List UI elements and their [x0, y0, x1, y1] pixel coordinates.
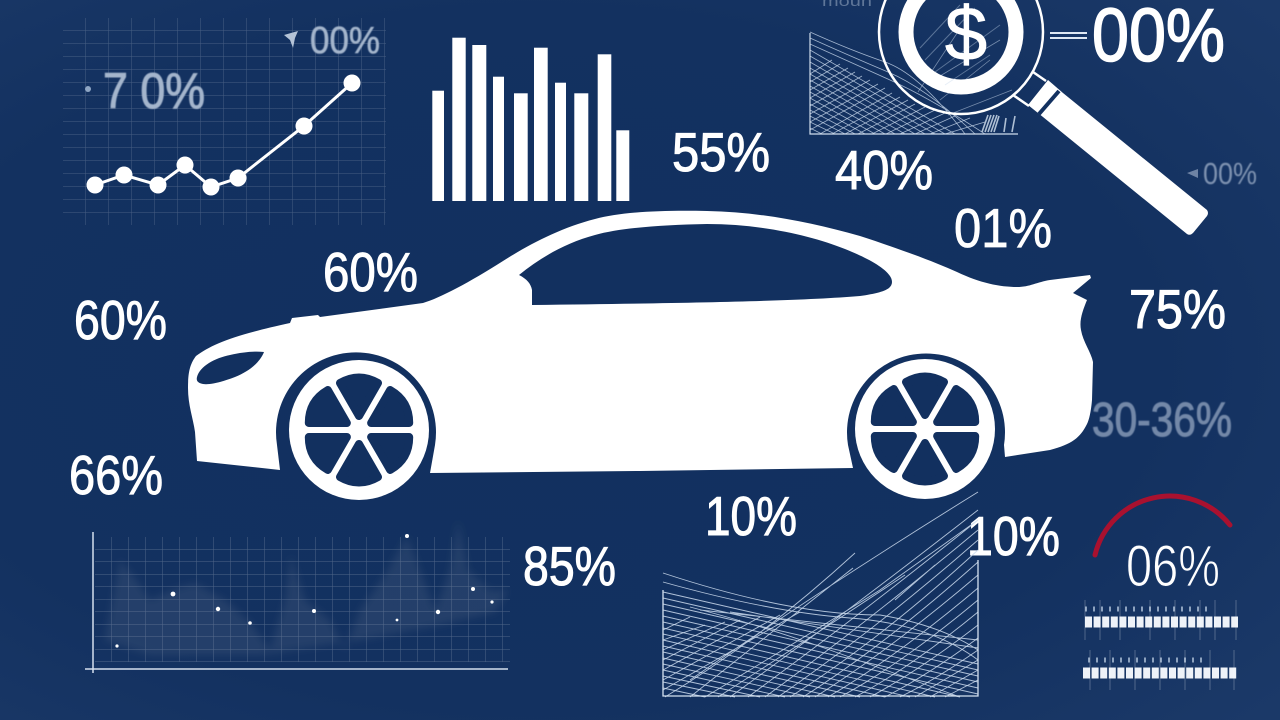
red gauge arc: [1095, 496, 1230, 555]
label 85%: 85%: [523, 535, 616, 597]
faded label 70%: 7 0%: [103, 63, 205, 119]
car headlight: [197, 352, 264, 384]
small hatched block: [982, 115, 1015, 132]
faint label 00% right: 00%: [1203, 156, 1257, 191]
barcode row one: [1085, 600, 1238, 640]
panel: top-left line chart: [63, 18, 386, 225]
label 60% hood: 60%: [323, 241, 418, 303]
label 55%: 55%: [672, 121, 770, 183]
faded label 30-36%: 30-36%: [1092, 394, 1232, 447]
label 40%: 40%: [835, 139, 933, 201]
chart axes: [810, 33, 1018, 134]
front wheel: [289, 360, 429, 500]
icon: magnifying glass with dollar: [879, 0, 1208, 235]
chart grid: [95, 537, 510, 662]
faint label 00% right: [1187, 156, 1257, 191]
chart grid: [63, 18, 386, 225]
axes: [85, 532, 508, 673]
panel: bottom mesh chart: [663, 492, 978, 697]
panel: bottom-left scatter chart: [85, 520, 510, 673]
label 60% left: 60%: [74, 289, 167, 351]
icon: small dot: [85, 86, 91, 92]
panel: top-right mesh chart: [810, 0, 1018, 134]
mesh lines: [663, 492, 978, 697]
faded label 00%: 00%: [310, 20, 380, 62]
label 06%: 06%: [1126, 534, 1220, 599]
data points: [115, 534, 494, 648]
blurred peaks: [105, 520, 508, 655]
icon: small arrow: [284, 31, 298, 48]
chart frame: [663, 560, 978, 696]
barcode row two: [1083, 650, 1237, 690]
car body: [188, 211, 1093, 473]
car silhouette: [188, 211, 1093, 500]
handle: [1013, 72, 1208, 235]
label 10% center: 10%: [705, 485, 797, 547]
lens reflections: [920, 5, 1000, 85]
label 66%: 66%: [69, 444, 163, 506]
dash connector to 00%: [1050, 33, 1087, 38]
rising data line: [86, 74, 360, 196]
car window: [519, 224, 892, 305]
bar chart: [432, 38, 629, 201]
mesh lines: [810, 32, 1012, 134]
label 10% right: 10%: [967, 505, 1060, 567]
label 75%: 75%: [1129, 278, 1226, 340]
panel: gauge with barcode rows: [1083, 496, 1238, 690]
label 01%: 01%: [954, 197, 1052, 259]
rear wheel: [855, 359, 995, 499]
